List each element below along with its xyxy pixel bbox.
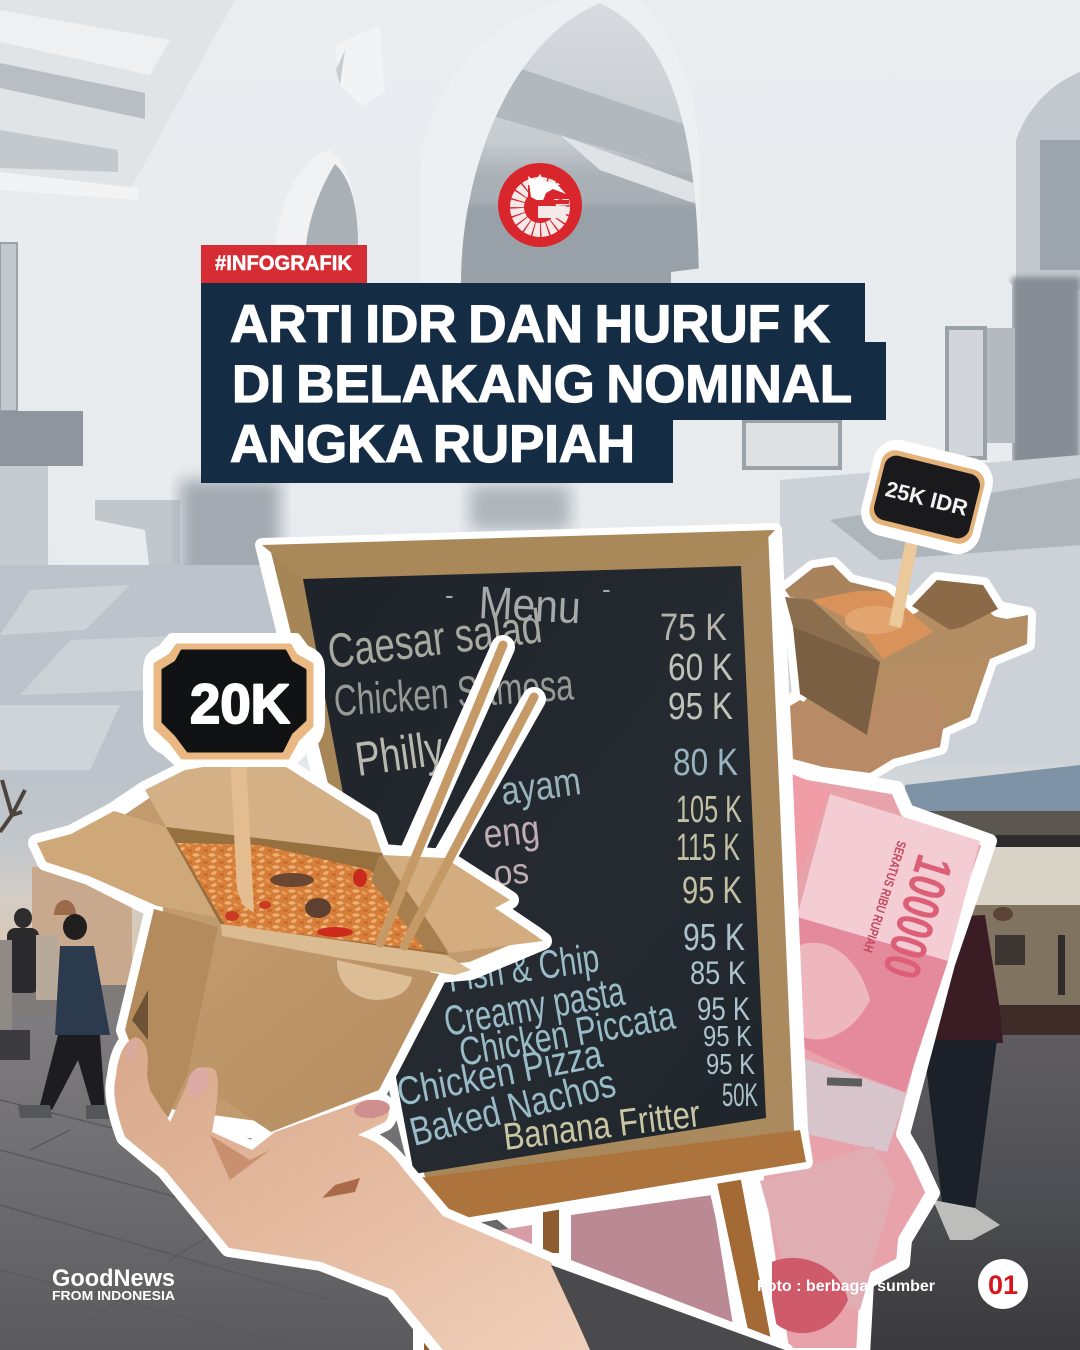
hand white outline behind box [114,1037,785,1350]
hand and arm holding the box [114,1037,785,1350]
right arch and stairs [1016,72,1080,290]
chalk writing: Chicken Samosa [332,660,575,726]
price column [660,607,758,1113]
background: plaza photo lower left [0,780,620,1350]
chopsticks [380,645,534,946]
chalk writing: - [445,580,454,610]
price column: 95 K [682,870,742,912]
white cut-out outline [785,565,1028,773]
rupiah banknotes [757,770,990,1350]
chalk writing: Caesar salad [325,600,545,679]
box rim [221,924,471,975]
chalk writing: ayam [498,759,583,814]
price column: 95 K [703,1021,753,1053]
page number badge [978,1259,1028,1309]
price column: 105 K [676,789,742,831]
price sign 20K [148,638,320,762]
easel legs and pink backdrop [413,1165,780,1350]
price sign 25K IDR: 25K IDR [883,476,971,521]
title background [201,283,886,483]
chopstick white outlines behind box [395,647,534,900]
front lip and faces [785,597,880,662]
price stick [889,538,918,628]
footer: photo credit: Foto : berbagai sumber [757,1278,935,1295]
box tab [337,960,412,1000]
big arch [420,0,700,285]
back flap [145,760,382,853]
banknote wording: SERATUS RIBU RUPIAH [860,839,909,954]
price sign 25K IDR [856,435,998,559]
logo: red G emblem [498,163,582,247]
hashtag tag: #INFOGRAFIK [215,252,352,275]
price column: 115 K [676,827,740,869]
chalk writing: Chicken Piccata [456,994,679,1075]
price column: 95 K [697,991,750,1027]
background: plaza photo lower right [600,765,1080,1350]
price column: 60 K [668,647,733,689]
chalk writing: Baked Nachos [406,1061,620,1155]
price column: 50K [722,1077,758,1113]
left takeaway box with fried rice [37,638,543,1132]
tree [0,780,25,832]
box front [187,927,439,1132]
title block [201,245,886,483]
price column: 95 K [683,917,745,959]
hashtag tag [201,245,367,283]
title text: DI BELAKANG NOMINAL [232,355,852,414]
footer: GoodNews brand: GoodNews [52,1265,175,1292]
footer: GoodNews brand: FROM INDONESIA [52,1289,175,1303]
price column: 75 K [660,607,727,649]
title text: ANGKA RUPIAH [230,415,635,474]
small arch [275,150,358,250]
chalk writing: Banana Fritter [501,1093,703,1159]
food in box [812,591,933,659]
dark sleeve [551,1265,785,1350]
left wall furniture [0,243,17,411]
person in maroon shirt [923,915,1003,1240]
price column: 95 K [706,1049,756,1081]
banknote value: 100000 [871,848,963,985]
chalk writing: Creamy pasta [440,967,628,1045]
fingers [867,689,945,739]
price column: 95 K [668,686,733,728]
title text: ARTI IDR DAN HURUF K [230,295,830,354]
right takeaway box held by hand [785,435,1028,773]
sign text: 20K [190,672,290,735]
people in plaza [0,908,111,1119]
box left face [125,909,218,1118]
right flap [382,855,543,953]
chalk writing: os [492,850,531,894]
left flap [37,811,221,918]
inner right wall [371,855,448,953]
chalk writing [325,574,758,1159]
floor [0,565,280,790]
inner box wall [166,827,448,955]
price stick [230,757,254,913]
back flaps [785,565,887,610]
title text [230,295,852,474]
menu heading: Menu [477,576,582,633]
fingernails [123,1037,391,1120]
background: monochrome colonial interior [0,3,1080,780]
board surface [303,566,766,1174]
hand under box [790,688,943,773]
page number badge: 01 [988,1270,1018,1300]
price column: 80 K [673,742,738,784]
chalk writing: eng [481,807,542,857]
chalk writing: Fish & Chip [445,936,602,1001]
price column: 85 K [690,955,746,991]
chalk writing: - [602,574,611,604]
chalkboard menu [262,530,806,1222]
board frame with white cut-out border [262,530,806,1222]
chalk writing: Philly [352,722,447,787]
chalk writing: Chicken Pizza [393,1032,607,1115]
fried rice [177,843,425,950]
white outline of the box [37,760,543,1132]
